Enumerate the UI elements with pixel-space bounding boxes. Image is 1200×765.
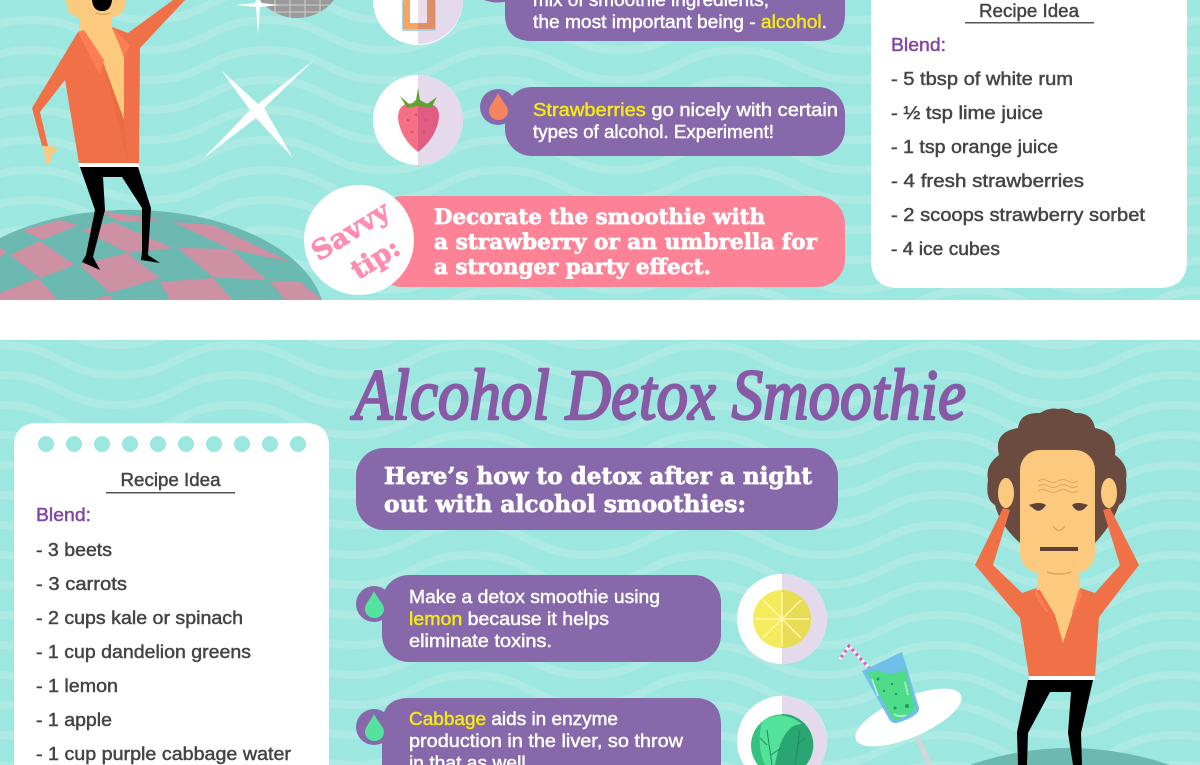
dance floor (0, 210, 322, 300)
panel: party recipe card: - 5 tbsp of white rum (891, 69, 1073, 89)
icon: lemon in circle (737, 574, 827, 664)
panel: detox recipe card: - 3 carrots (36, 574, 127, 594)
callout: savvy tip: Decorate the smoothie with (434, 204, 765, 229)
icon: disco ball (235, 0, 334, 35)
panel: party recipe card: - 4 fresh strawberries (891, 171, 1084, 191)
title: Alcohol Detox Smoothie (351, 355, 966, 435)
panel: party recipe card: Blend: (891, 35, 946, 55)
callout: lemon: Make a detox smoothie using (409, 587, 660, 607)
callout: cabbage: Cabbage aids in enzyme (409, 709, 618, 729)
panel: party recipe card: - 2 scoops strawberry sorbet (891, 205, 1145, 225)
callout: intro heading: Here’s how to detox after a night (384, 463, 812, 490)
callout: strawberries: types of alcohol. Experiment! (533, 122, 774, 142)
icon: cabbage in circle (737, 696, 827, 765)
callout: savvy tip (304, 185, 845, 295)
panel: party recipe card: - ½ tsp lime juice (891, 103, 1043, 123)
panel: detox recipe card: - 1 cup purple cabbage water (36, 744, 291, 764)
dance floor stub (970, 748, 1170, 765)
panel: detox recipe card: - 3 beets (36, 540, 112, 560)
callout: savvy tip: a stronger party effect. (434, 254, 711, 279)
forehead wrinkles (1038, 480, 1078, 492)
callout: strawberries: Strawberries go nicely with certain (533, 100, 838, 120)
panel: detox recipe card: - 1 lemon (36, 676, 118, 696)
callout: savvy tip: tip: (346, 232, 406, 286)
panel: party recipe card: - 4 ice cubes (891, 239, 1000, 259)
icon: green droplet (365, 714, 384, 741)
callout: lemon: lemon because it helps (409, 609, 609, 629)
callout: cabbage: production in the liver, so throw (409, 731, 684, 751)
callout: alcohol ingredient: the most important being - alcohol. (533, 12, 827, 32)
icon: strawberry in circle (373, 75, 463, 165)
icon: cocktail table with green drink (840, 646, 969, 765)
callout: savvy tip: a strawberry or an umbrella for (434, 229, 818, 254)
panel: detox smoothie background (0, 340, 1200, 765)
panel: party smoothie background (0, 0, 1200, 300)
panel: detox recipe card: - 1 cup dandelion greens (36, 642, 251, 662)
callout: cabbage (356, 698, 721, 765)
panel: detox recipe card (14, 423, 329, 765)
panel: party recipe card: Recipe Idea (979, 1, 1080, 21)
panel: party recipe card (871, 0, 1187, 288)
callout: intro heading: out with alcohol smoothies: (384, 491, 746, 518)
panel: detox recipe card: Blend: (36, 505, 91, 525)
figure: hungover man (970, 408, 1170, 765)
panel: party recipe card: - 1 tsp orange juice (891, 137, 1058, 157)
panel: detox recipe card: - 1 apple (36, 710, 112, 730)
icon: bottle in circle (373, 0, 463, 45)
panel: detox recipe card: Recipe Idea (120, 470, 222, 490)
callout: alcohol ingredient (484, 0, 845, 41)
figure: dancing man (32, 0, 185, 270)
callout: lemon (356, 575, 721, 662)
callout: savvy tip: Savvy (306, 195, 397, 268)
callout: strawberries (480, 87, 845, 156)
callout: lemon: eliminate toxins. (409, 631, 552, 651)
icon: big sparkle (204, 60, 314, 158)
icon: orange droplet (489, 93, 508, 120)
callout: intro heading (356, 448, 838, 530)
panel: detox recipe card: - 2 cups kale or spinach (36, 608, 243, 628)
icon: green droplet (365, 591, 384, 618)
